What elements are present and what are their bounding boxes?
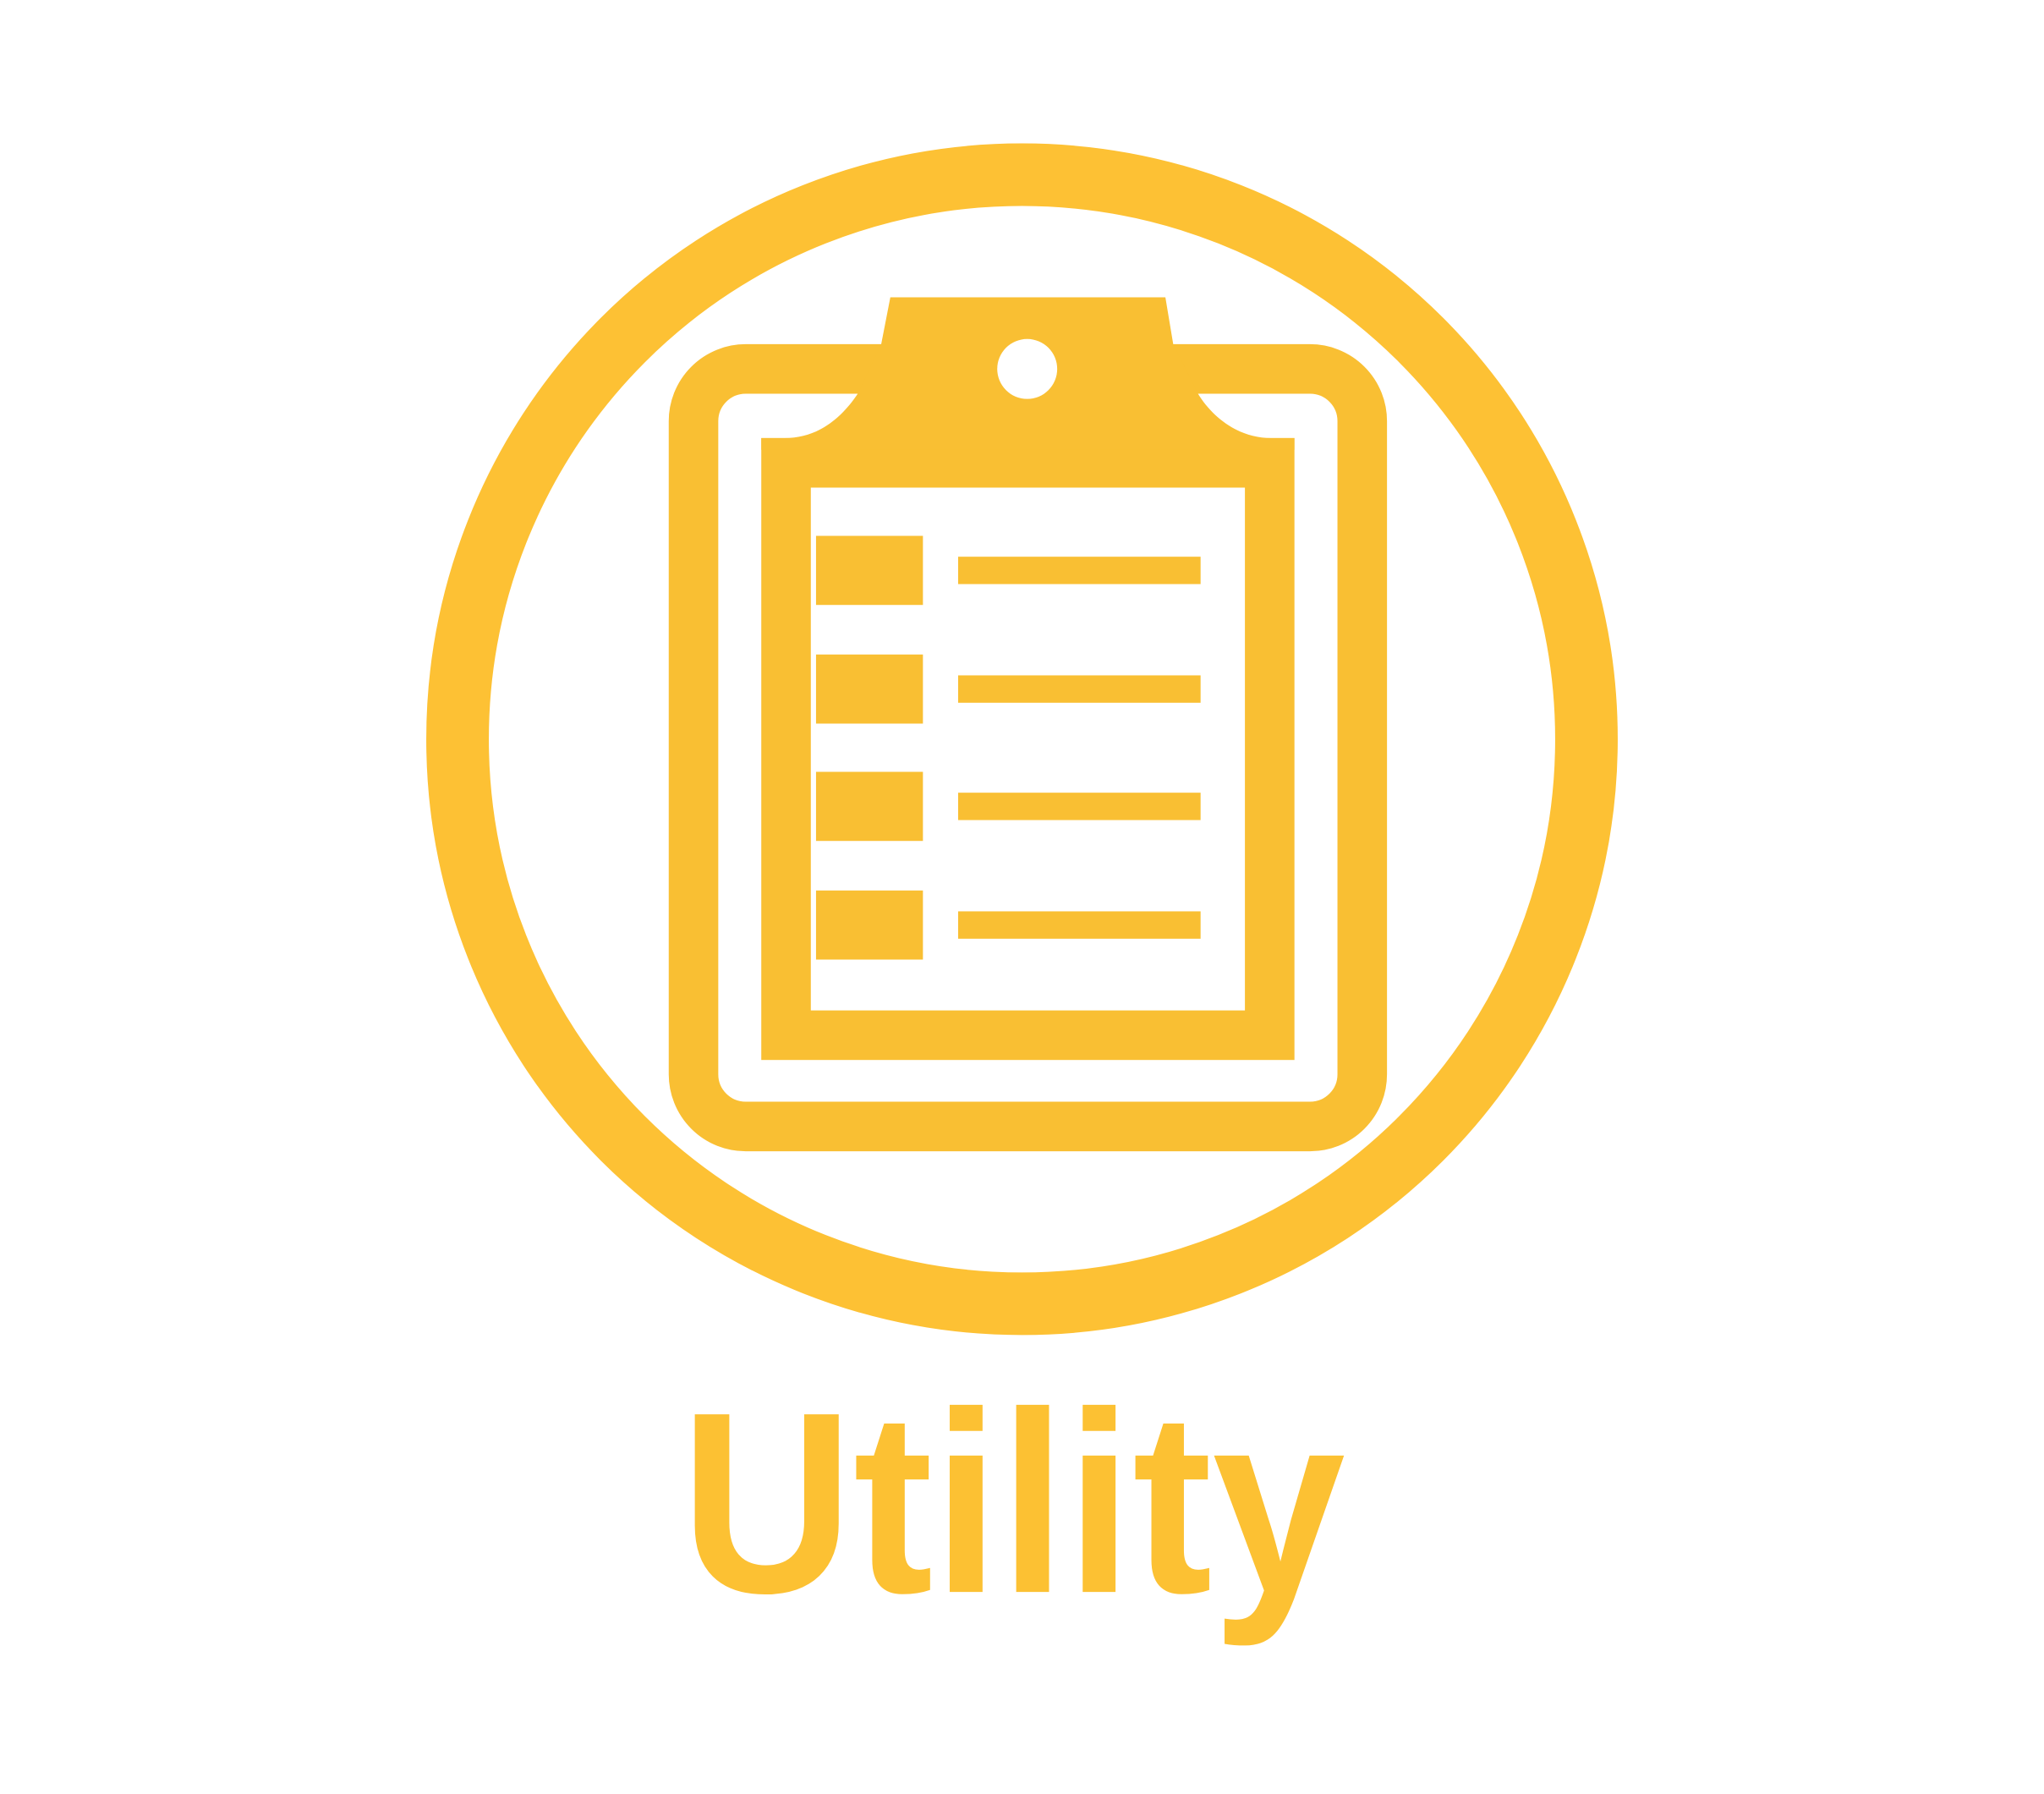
title: Utility: Utility — [681, 1358, 1347, 1649]
icon: circle ring — [458, 175, 1586, 1303]
icon: clipboard — [693, 297, 1362, 1127]
